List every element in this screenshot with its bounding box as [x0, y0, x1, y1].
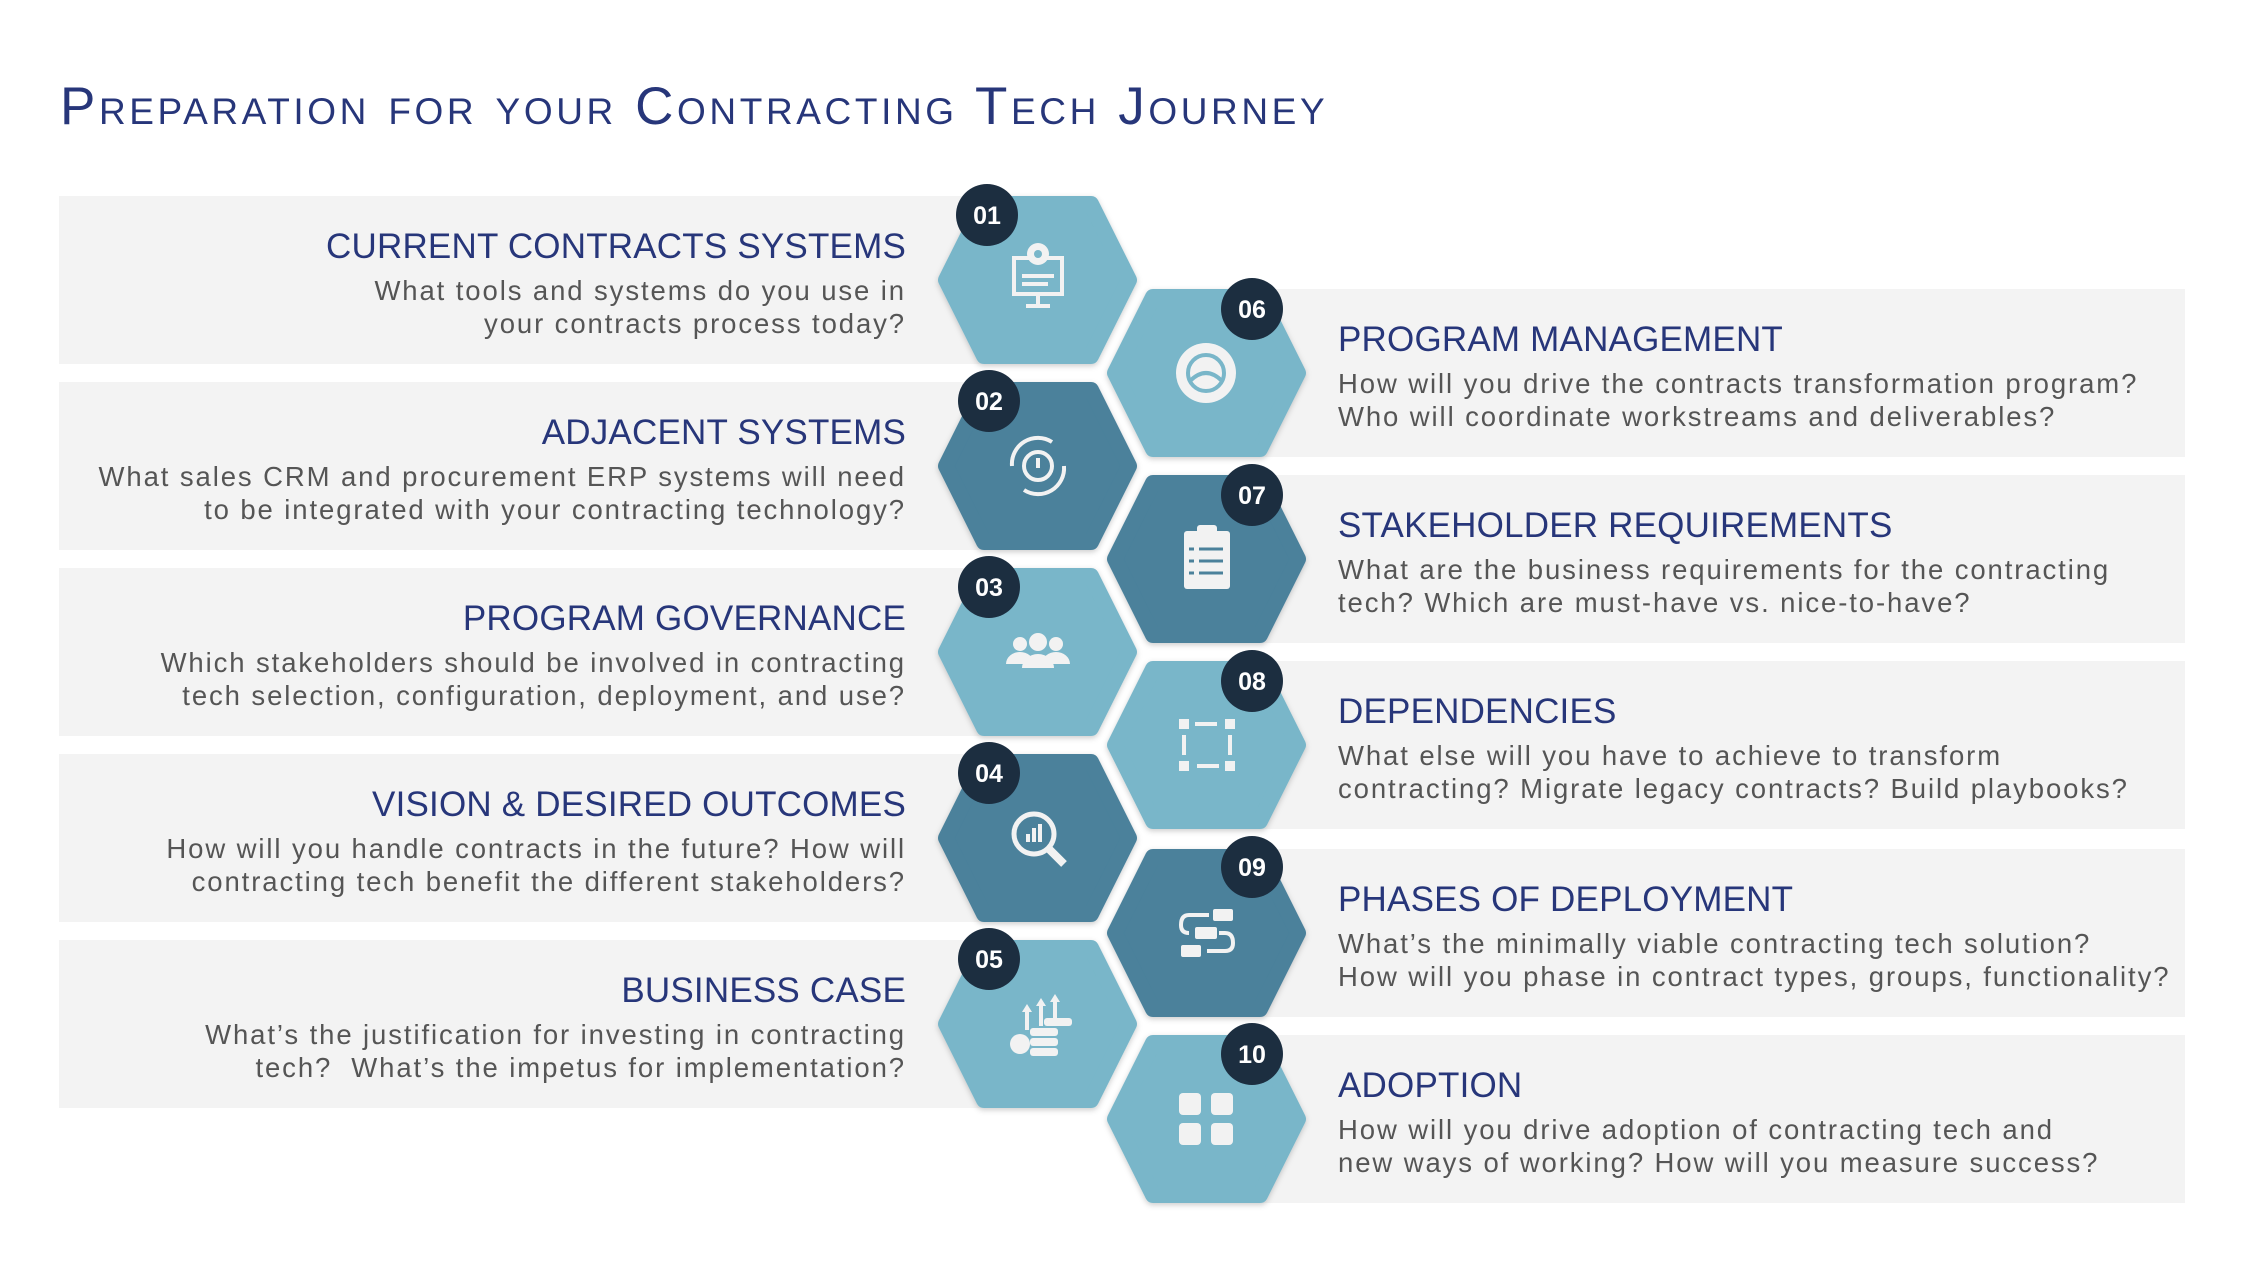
panel: 07 stakeholder requirements: STAKEHOLDER REQUIREMENTS — [1338, 506, 1893, 545]
badge 01 — [956, 184, 1018, 246]
panel: 09 phases of deployment: How will you phase in contract types, groups, functionality? — [1338, 961, 2170, 992]
panel: 03 program governance — [59, 568, 1019, 736]
hex 05 — [946, 948, 1129, 1100]
panel: 07 stakeholder requirements: What are the business requirements for the contracting — [1338, 554, 2110, 585]
panel: 04 vision: contracting tech benefit the different stakeholders? — [192, 866, 906, 897]
badge 03: 03 — [975, 574, 1003, 602]
panel: 09 phases of deployment: What’s the minimally viable contracting tech solution? — [1338, 928, 2091, 959]
hex 02 — [946, 390, 1129, 542]
badge 02: 02 — [975, 388, 1003, 416]
badge 01: 01 — [973, 202, 1001, 230]
badge 08: 08 — [1238, 668, 1266, 696]
badge 08 — [1221, 650, 1283, 712]
panel: 05 business case — [59, 940, 1019, 1108]
badge 05: 05 — [975, 946, 1003, 974]
panel: 10 adoption — [1230, 1035, 2185, 1203]
panel: 06 program management: How will you drive the contracts transformation program? — [1338, 368, 2138, 399]
badge 06 — [1221, 278, 1283, 340]
panel: 06 program management — [1230, 289, 2185, 457]
hex 03 — [946, 576, 1129, 728]
panel: 06 program management: PROGRAM MANAGEMENT — [1338, 320, 1783, 359]
panel: 09 phases of deployment — [1230, 849, 2185, 1017]
panel: 08 dependencies — [1230, 661, 2185, 829]
badge 04: 04 — [975, 760, 1003, 788]
badge 09: 09 — [1238, 854, 1266, 882]
panel: 03 program governance: PROGRAM GOVERNANCE — [463, 599, 906, 638]
panel: 01 current contracts systems — [59, 196, 1019, 364]
panel: 06 program management: Who will coordinate workstreams and deliverables? — [1338, 401, 2056, 432]
panel: 02 adjacent systems: What sales CRM and procurement ERP systems will need — [99, 461, 906, 492]
badge 07 — [1221, 464, 1283, 526]
panel: 03 program governance: tech selection, configuration, deployment, and use? — [182, 680, 906, 711]
panel: 10 adoption: new ways of working? How will you measure success? — [1338, 1147, 2099, 1178]
panel: 08 dependencies: DEPENDENCIES — [1338, 692, 1617, 731]
panel: 05 business case: BUSINESS CASE — [621, 971, 906, 1010]
hex 09 — [1115, 857, 1298, 1009]
badge 05 — [958, 928, 1020, 990]
panel: 08 dependencies: What else will you have to achieve to transform — [1338, 740, 2002, 771]
panel: 04 vision — [59, 754, 1019, 922]
panel: 07 stakeholder requirements — [1230, 475, 2185, 643]
badge 07: 07 — [1238, 482, 1266, 510]
panel: 05 business case: What’s the justification for investing in contracting — [205, 1019, 906, 1050]
panel: 10 adoption: ADOPTION — [1338, 1066, 1522, 1105]
badge 02 — [958, 370, 1020, 432]
panel: 10 adoption: How will you drive adoption of contracting tech and — [1338, 1114, 2054, 1145]
panel: 03 program governance: Which stakeholders should be involved in contracting — [161, 647, 906, 678]
hex 01 — [946, 204, 1129, 356]
panel: 09 phases of deployment: PHASES OF DEPLOYMENT — [1338, 880, 1793, 919]
panel: 01 current contracts systems: What tools and systems do you use in — [374, 275, 906, 306]
hex 10 — [1115, 1043, 1298, 1195]
hex 06 — [1115, 297, 1298, 449]
panel: 02 adjacent systems: ADJACENT SYSTEMS — [542, 413, 906, 452]
hex 08 — [1115, 669, 1298, 821]
panel: 08 dependencies: contracting? Migrate legacy contracts? Build playbooks? — [1338, 773, 2129, 804]
panel: 02 adjacent systems: to be integrated with your contracting technology? — [204, 494, 906, 525]
badge 06: 06 — [1238, 296, 1266, 324]
hex 04 — [946, 762, 1129, 914]
panel: 01 current contracts systems: CURRENT CONTRACTS SYSTEMS — [326, 227, 906, 266]
panel: 05 business case: tech? What’s the impetus for implementation? — [255, 1052, 906, 1083]
badges — [956, 184, 1283, 1085]
badge 04 — [958, 742, 1020, 804]
panel: 01 current contracts systems: your contracts process today? — [484, 308, 906, 339]
title: Preparation for your Contracting Tech Journey — [60, 77, 1328, 136]
hex 07 — [1115, 483, 1298, 635]
panel: 07 stakeholder requirements: tech? Which are must-have vs. nice-to-have? — [1338, 587, 1971, 618]
badge 09 — [1221, 836, 1283, 898]
badge 10 — [1221, 1023, 1283, 1085]
badge 03 — [958, 556, 1020, 618]
panel: 02 adjacent systems — [59, 382, 1019, 550]
panel: 04 vision: VISION & DESIRED OUTCOMES — [372, 785, 906, 824]
panel: 04 vision: How will you handle contracts in the future? How will — [166, 833, 906, 864]
badge 10: 10 — [1238, 1041, 1266, 1069]
